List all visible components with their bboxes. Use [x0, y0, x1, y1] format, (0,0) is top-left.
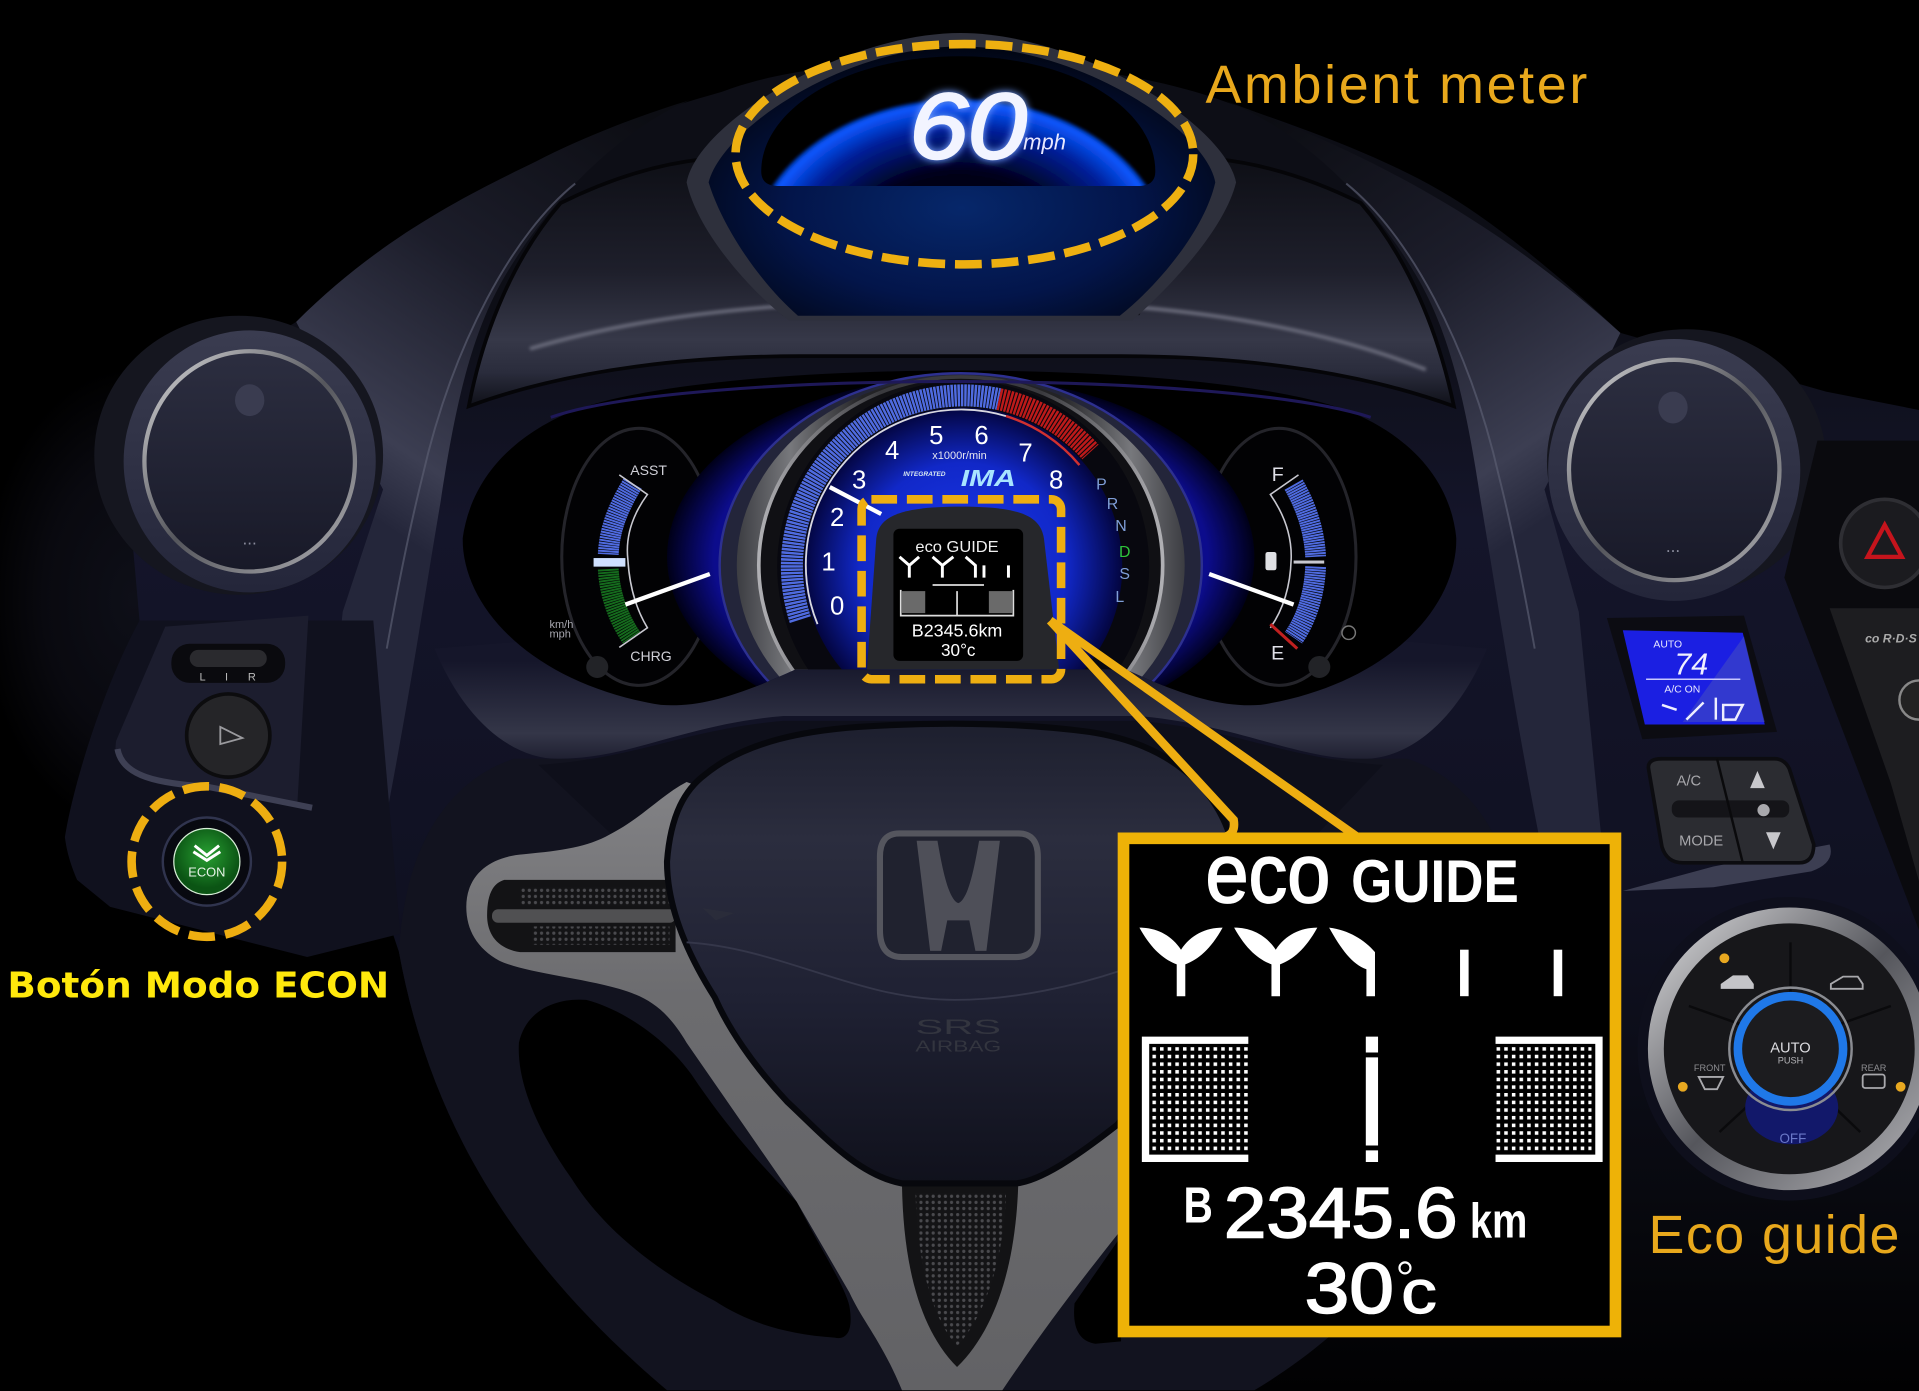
display glare: [1683, 636, 1765, 722]
unit km/h: km/h: [550, 619, 573, 631]
trip letter: B: [1183, 1176, 1213, 1234]
right gauge outline: [1202, 428, 1356, 685]
small odometer: B2345.6km: [912, 620, 1002, 640]
odometer unit: km: [1470, 1194, 1527, 1248]
hazard button: [1841, 499, 1919, 587]
IMA small label: INTEGRATED: [903, 471, 946, 478]
left gauge scale: [619, 475, 647, 647]
left gauge charge bar: [608, 569, 632, 638]
speed value: 60: [909, 74, 1027, 178]
label: ambient meter: Ambient meter: [1205, 55, 1587, 115]
airbag hub: [667, 724, 1236, 1183]
small dots right: [989, 591, 1012, 613]
bottom spoke mesh: [915, 1193, 1006, 1346]
right gauge needle: [1209, 574, 1294, 605]
dial segments: [1689, 942, 1891, 1132]
label: eco guide: Eco guide: [1649, 1205, 1899, 1265]
right arm highlight: [1346, 184, 1535, 649]
vent inner pod: [1548, 339, 1800, 601]
fan icon: [1757, 804, 1770, 816]
REAR label: REAR: [1861, 1063, 1887, 1073]
label ASST: ASST: [630, 462, 667, 478]
radio knob: [1899, 680, 1919, 720]
left gauge outline: [562, 428, 716, 685]
left block frame: [1146, 1040, 1248, 1158]
ring chrome: [1729, 988, 1852, 1110]
panel: ambient meter pod: [686, 33, 1236, 316]
hub contour: [687, 942, 1121, 1000]
rear defrost icon: [1863, 1075, 1885, 1088]
eco guide dashed highlight: [862, 499, 1061, 679]
spoke trim: [466, 782, 1121, 1390]
gear selector: [1096, 477, 1130, 606]
sprout 5: [1554, 950, 1562, 996]
right lit strip: [1623, 844, 1831, 891]
left gauge assist bar: [608, 483, 633, 554]
emblem letter H: [917, 841, 1000, 951]
left spoke bar: [492, 909, 676, 923]
selector pill: [190, 650, 267, 667]
tachometer needle: [830, 487, 881, 514]
off glow: [1745, 1071, 1838, 1144]
tachometer numbers: 8: [1049, 466, 1063, 494]
sprout 2: [1234, 928, 1317, 996]
pad divider: [1717, 759, 1743, 863]
tachometer numbers: 2: [830, 504, 844, 532]
redline scale: [1006, 416, 1079, 465]
OFF label: OFF: [1779, 1131, 1806, 1146]
mirror knob: [187, 694, 270, 777]
left spoke upper mesh: [520, 887, 669, 906]
AUTO label: AUTO: [1653, 639, 1682, 650]
small gauge: [901, 585, 1013, 616]
MODE button text: MODE: [1679, 834, 1723, 850]
panel: left switch bank: [116, 616, 312, 808]
panel: climate buttons: [1648, 759, 1814, 863]
odometer value: 2345.6: [1224, 1174, 1458, 1253]
unit mph: mph: [550, 629, 571, 641]
small eco guide screen: [893, 529, 1023, 661]
temperature unit: c: [1401, 1258, 1437, 1326]
temperature value: 30: [1305, 1250, 1394, 1329]
bottom spoke recess: [902, 1185, 1018, 1367]
tachometer numbers: 4: [885, 437, 899, 465]
left trip knob: [586, 656, 608, 678]
down arrow: [1766, 832, 1781, 849]
recess lit edge: [118, 749, 312, 808]
stack background: [1784, 441, 1919, 930]
panel: climate dial: [1637, 897, 1919, 1201]
left gauge needle: [625, 574, 710, 605]
emblem outline: [880, 833, 1038, 957]
mirror selector: [171, 644, 285, 683]
gear selector: P: [1096, 477, 1107, 494]
tachometer well: [778, 384, 1149, 670]
sprout 4: [1460, 950, 1469, 996]
right arm: [1224, 100, 1620, 881]
display bezel: [1607, 616, 1777, 739]
visor highlight left: [530, 306, 786, 349]
left gauge midpoint: [594, 558, 625, 567]
small temperature: 30°c: [941, 640, 976, 660]
right gauge tick: [1294, 561, 1324, 564]
divider: [1646, 678, 1740, 680]
AUTO button text: AUTO: [1770, 1040, 1811, 1056]
small dots left: [902, 591, 925, 613]
small title: eco GUIDE: [915, 539, 999, 556]
sprout 3: [1329, 928, 1375, 996]
ECON button: [163, 818, 251, 906]
front defrost icon: [1699, 1077, 1723, 1089]
fuel icon: [1265, 552, 1276, 570]
panel: climate display: [1607, 616, 1777, 739]
panel: centre stack: [1784, 441, 1919, 930]
horn icon: [702, 908, 734, 920]
vent inner pod: [124, 330, 376, 592]
centre marker: [1367, 1037, 1377, 1162]
blue arch glow: [770, 97, 1148, 186]
panel: steering wheel: [399, 721, 1522, 1390]
rpm unit: x1000r/min: [932, 450, 987, 462]
button pad: [1648, 759, 1814, 863]
hazard icon: [1868, 525, 1902, 557]
right gauge fuel bar bottom: [1294, 567, 1316, 638]
dial base: [1637, 897, 1919, 1201]
rev bar red: [999, 399, 1090, 452]
tachometer numbers: 7: [1018, 439, 1033, 467]
dial chrome ring: [1656, 915, 1919, 1182]
tachometer numbers: 3: [852, 466, 866, 494]
pod grey surround: [687, 33, 1236, 321]
rim grey band: [736, 380, 1185, 676]
vent bezel: [1569, 360, 1779, 580]
button rim: [163, 818, 251, 906]
switch recess: [116, 616, 308, 803]
gear selector: N: [1115, 518, 1127, 535]
IMA logo: IMA: [961, 465, 1016, 491]
temperature degree: [1399, 1262, 1410, 1273]
tachometer numbers: 5: [929, 422, 943, 450]
small sprouts: [900, 557, 1008, 578]
PUSH text: PUSH: [1778, 1056, 1803, 1066]
rev scale: [806, 410, 1006, 624]
button face: [174, 829, 240, 895]
right economy block: [1496, 1040, 1599, 1158]
tachometer numbers: [821, 422, 1063, 620]
gear selector: D: [1119, 544, 1130, 561]
small screen background: [893, 529, 1023, 661]
right block frame: [1496, 1040, 1599, 1158]
display screen: [1623, 630, 1765, 725]
left wheel opening: [519, 1000, 851, 1338]
small eco guide pod: [866, 507, 1060, 676]
mirror icon: [220, 727, 242, 744]
A/C ON label: A/C ON: [1664, 685, 1700, 696]
left dim glow: [0, 367, 288, 832]
ECON dashed highlight: [132, 786, 282, 937]
radio logo: co R·D·S: [1865, 632, 1918, 646]
label: ECON button: Botón Modo ECON: [7, 965, 389, 1006]
rim to hub shadow: [539, 721, 1383, 881]
callout frame: [1123, 838, 1615, 1332]
left spoke lower mesh: [532, 926, 669, 945]
rim highlight: [757, 375, 1164, 672]
radio panel: [1830, 608, 1919, 881]
speed glow: 60: [909, 74, 1027, 178]
pod blue bowl: [709, 47, 1215, 316]
visor highlight right: [1120, 306, 1426, 370]
left arm highlight: [387, 184, 575, 649]
ambient meter dashed highlight: [736, 44, 1193, 264]
right gauge fuel bar top: [1294, 485, 1316, 557]
rev bar blue: [792, 395, 999, 620]
right wheel opening: [1074, 1236, 1121, 1344]
gear selector: R: [1107, 496, 1118, 513]
airflow icons: [1662, 698, 1743, 720]
callout title guide: GUIDE: [1351, 848, 1519, 915]
vent dots: ...: [1666, 536, 1680, 556]
indicator lamps: [1683, 958, 1901, 1087]
vent outer pod: [1547, 329, 1826, 594]
left arm: [296, 100, 689, 881]
callout pointer: [1050, 620, 1361, 840]
SRS text: SRS: [915, 1016, 1001, 1039]
steering rim: [399, 759, 1522, 1390]
callout title eco: eco: [1205, 827, 1330, 920]
vent knob: [1658, 392, 1688, 423]
ambient display: [761, 56, 1155, 186]
tachometer numbers: 0: [830, 592, 844, 620]
gear selector: S: [1119, 566, 1130, 583]
AIRBAG text: AIRBAG: [915, 1038, 1001, 1055]
label F: F: [1272, 464, 1284, 486]
vent bezel: [144, 351, 355, 572]
tachometer numbers: 1: [821, 548, 836, 576]
button leaf icon: [193, 846, 220, 860]
cluster purple trim: [551, 382, 1371, 417]
sprout 1: [1139, 928, 1223, 996]
empty marker: [1270, 624, 1297, 649]
vent knob: [235, 384, 264, 416]
right trip knob: [1308, 656, 1330, 678]
left switch panel: [65, 620, 400, 957]
label CHRG: CHRG: [630, 648, 672, 664]
cluster opening: [462, 370, 1456, 706]
speed unit: mph: [1023, 129, 1066, 154]
up arrow: [1750, 771, 1765, 788]
trip reset icon: [1342, 626, 1355, 639]
selector labels: L I R: [200, 671, 256, 683]
gear selector: L: [1115, 589, 1124, 606]
fresh air icon: [1831, 977, 1863, 989]
recirculate icon: [1721, 975, 1754, 989]
right block dots: [1496, 1047, 1591, 1153]
pad groove: [1672, 800, 1789, 818]
FRONT label: FRONT: [1694, 1063, 1726, 1073]
visor hood: [469, 159, 1454, 406]
temperature: 74: [1674, 647, 1708, 681]
A/C button text: A/C: [1677, 774, 1702, 790]
left spoke recess: [487, 880, 676, 952]
right gauge scale: [1270, 475, 1298, 628]
tachometer face: [804, 408, 1122, 670]
callout: eco guide display: [1123, 827, 1615, 1332]
rim outer: [718, 372, 1203, 682]
panel: instrument cluster: [462, 370, 1456, 706]
blue ring: [1738, 996, 1843, 1101]
left economy block: [1146, 1040, 1248, 1158]
Honda emblem: [880, 833, 1038, 957]
vent outer pod: [94, 316, 383, 595]
tachometer numbers: 6: [974, 422, 989, 450]
panel: right vent: [1547, 329, 1826, 601]
button text: ECON: [188, 864, 225, 879]
instrument band: [434, 636, 1487, 759]
blue surround: [667, 385, 1254, 686]
left block dots: [1152, 1047, 1248, 1153]
vent dots: ...: [243, 529, 257, 549]
label E: E: [1271, 643, 1284, 665]
panel: left vent: [94, 316, 383, 595]
